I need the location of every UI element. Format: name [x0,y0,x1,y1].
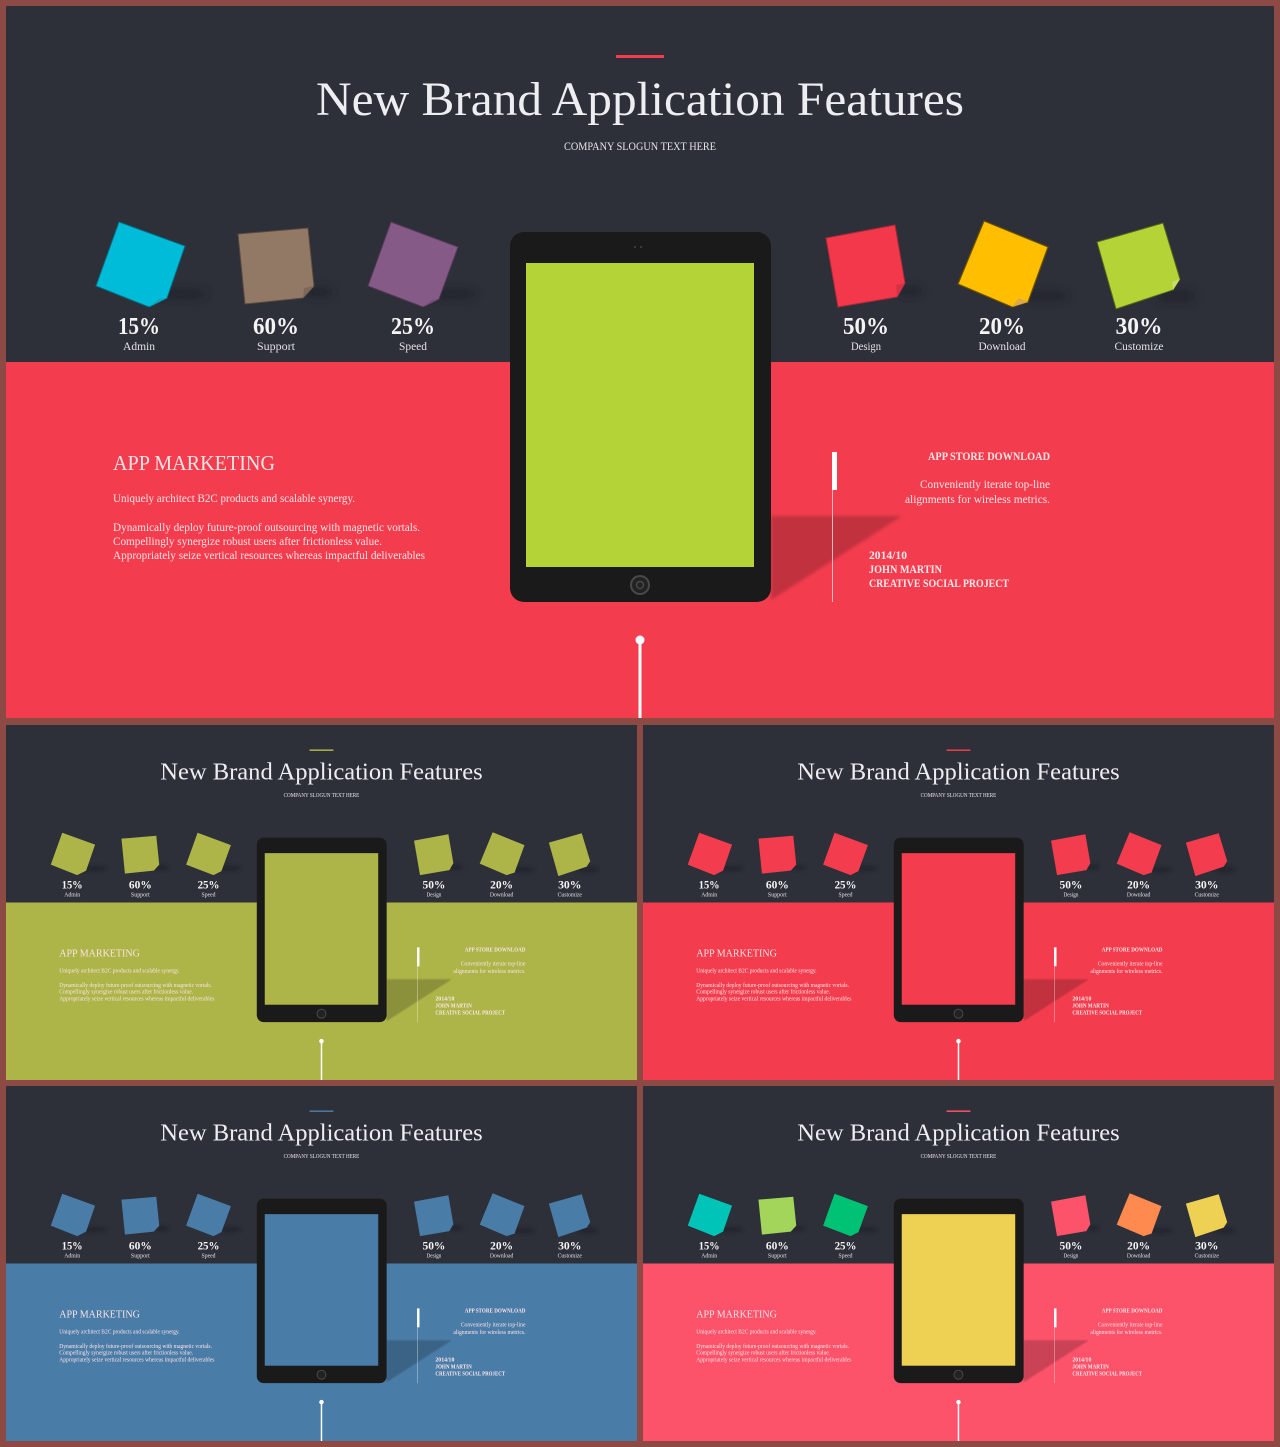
note: speed [368,222,478,307]
stats row: 25% [835,1239,856,1253]
stats row: 50% [422,1239,445,1253]
stats row [62,1239,582,1260]
text block: marketing: Appropriately seize vertical resources whereas impactful deliverables [696,1357,852,1364]
title: New Brand Application Features [160,759,483,785]
stats row: Customize [558,893,582,899]
stat: speed [391,314,435,353]
stats row: Support [131,893,150,899]
stats row: 20% [1127,878,1150,892]
text block: app store and credit [1072,1308,1163,1378]
text block: app store [905,451,1050,506]
stats row: 50% [1059,1239,1082,1253]
stat: admin: 15% [118,314,160,340]
tablet [894,838,1024,1022]
stats row: Support [768,1254,787,1260]
text block: marketing: Dynamically deploy future-proof outsourcing with magnetic vortals. [59,1343,212,1350]
text block: marketing: Dynamically deploy future-proof outsourcing with magnetic vortals. [696,982,849,989]
tablet [894,1199,1024,1383]
text block: app store and credit: Conveniently iterate top-line [1098,1322,1163,1328]
divider marker [832,452,837,602]
stats row: 20% [490,878,513,892]
stat: speed: Speed [399,339,427,353]
text block: marketing: APP MARKETING [696,948,777,959]
stats row: Download [1127,893,1150,899]
text block: marketing: Appropriately seize vertical resources whereas impactful deliverables [59,996,215,1003]
stats row: 50% [422,878,445,892]
text block: marketing copy [113,491,425,562]
heading: app marketing: APP MARKETING [113,451,275,475]
text block: marketing: APP MARKETING [59,1309,140,1320]
note: download [958,221,1069,307]
text block: app store and credit: CREATIVE SOCIAL PROJECT [435,1372,505,1378]
stats row: 15% [62,878,83,892]
text block: project credit [869,550,1009,590]
text block: app store: Conveniently iterate top-line [920,477,1050,491]
stats row [699,1239,1219,1260]
note: admin [96,222,208,307]
stats row: Customize [558,1254,582,1260]
stats row: Admin [64,893,80,899]
stat: design: Design [851,339,881,353]
text block: marketing [696,948,852,1003]
text block: app store: APP STORE DOWNLOAD [928,451,1050,463]
stats row: Support [768,893,787,899]
text block: marketing copy: Appropriately seize vertical resources whereas impactful deliverables [113,548,425,562]
text block: marketing: Appropriately seize vertical resources whereas impactful deliverables [59,1357,215,1364]
text block: app store and credit: JOHN MARTIN [1072,1004,1110,1010]
title: New Brand Application Features [316,73,964,126]
panel: blue slide: COMPANY SLOGUN TEXT HERE [284,1154,360,1160]
text block: app store and credit: Conveniently iterate top-line [461,1322,526,1328]
stats row: Design [426,893,441,899]
text block: marketing copy: Dynamically deploy future-proof outsourcing with magnetic vortals. [113,520,420,534]
note: customize [1097,223,1196,309]
stats row: 20% [1127,1239,1150,1253]
text block: marketing [59,948,215,1003]
stats row: Design [426,1254,441,1260]
stat: admin: Admin [123,339,155,353]
text block: app store and credit: APP STORE DOWNLOAD [465,947,525,953]
tablet [257,1199,387,1383]
text block: marketing: Compellingly synergize robust users after frictionless value. [696,989,831,996]
stats row: 30% [1195,1239,1218,1253]
panel: blue slide [6,1086,637,1441]
stats row: Speed [202,1254,215,1260]
stat: support: Support [257,339,296,353]
stats row: 25% [198,878,219,892]
stats row: Speed [839,893,852,899]
notes row [688,1193,1235,1237]
stats row: 15% [699,878,720,892]
stats row: 60% [766,878,789,892]
text block: app store and credit: 2014/10 [1072,1358,1091,1364]
text block: marketing copy: Compellingly synergize robust users after frictionless value. [113,534,382,548]
stats row: Support [131,1254,150,1260]
panel: red slide [643,725,1274,1080]
text block: marketing: APP MARKETING [696,1309,777,1320]
text block: project credit: JOHN MARTIN [869,564,943,576]
text block: app store and credit: CREATIVE SOCIAL PROJECT [1072,1372,1142,1378]
text block: app store and credit: 2014/10 [1072,997,1091,1003]
stats row: 60% [766,1239,789,1253]
tablet [257,838,387,1022]
stat: design [843,314,889,353]
text block: app store and credit: 2014/10 [435,1358,454,1364]
stat: download [978,314,1026,353]
stats row: 15% [699,1239,720,1253]
text block: app store and credit: 2014/10 [435,997,454,1003]
text block: project credit: 2014/10 [869,550,907,562]
text block: marketing: Dynamically deploy future-proof outsourcing with magnetic vortals. [59,982,212,989]
stats row: 25% [198,1239,219,1253]
text block: marketing copy: Uniquely architect B2C products and scalable synergy. [113,491,355,505]
text block: marketing: Uniquely architect B2C products and scalable synergy. [696,1329,817,1335]
stats row: Customize [1195,893,1219,899]
text block: app store and credit [1072,947,1163,1017]
stat: admin [118,314,160,353]
text block: app store and credit: alignments for wireless metrics. [453,968,526,975]
stats row: Speed [839,1254,852,1260]
text block: marketing: Uniquely architect B2C products and scalable synergy. [696,968,817,974]
note: design [826,225,923,307]
text block: app store and credit: CREATIVE SOCIAL PROJECT [435,1011,505,1017]
stats row: Admin [701,1254,717,1260]
notes row [51,832,598,876]
text block: marketing: Appropriately seize vertical resources whereas impactful deliverables [696,996,852,1003]
stats row: 30% [558,878,581,892]
text block: app store and credit: alignments for wireless metrics. [453,1329,526,1336]
text block: marketing: Uniquely architect B2C products and scalable synergy. [59,1329,180,1335]
text block: app store and credit: JOHN MARTIN [435,1365,473,1371]
text block: app store and credit: alignments for wireless metrics. [1090,1329,1163,1336]
stats row: Design [1063,1254,1078,1260]
stats row: Download [490,1254,513,1260]
title: New Brand Application Features [160,1120,483,1146]
panel: main slide [6,6,1274,718]
stats row [62,878,582,899]
stats row: 30% [1195,878,1218,892]
text block: marketing: Compellingly synergize robust users after frictionless value. [696,1350,831,1357]
text block: marketing [696,1309,852,1364]
stats row: Download [490,893,513,899]
stats row: 60% [129,878,152,892]
stat: download: Download [978,339,1026,353]
stat: support [253,314,299,353]
text block: app store and credit: APP STORE DOWNLOAD [1102,1308,1162,1314]
stats row: Download [1127,1254,1150,1260]
stat: download: 20% [979,314,1025,340]
notes row [51,1193,598,1237]
stats row: 30% [558,1239,581,1253]
title: New Brand Application Features [797,1120,1120,1146]
note: support [238,228,333,304]
stats row: 60% [129,1239,152,1253]
text block: project credit: CREATIVE SOCIAL PROJECT [869,578,1009,590]
stats row: 15% [62,1239,83,1253]
accent line [616,55,664,58]
text block: app store and credit: APP STORE DOWNLOAD [465,1308,525,1314]
stat: speed: 25% [391,314,435,340]
text block: app store and credit: alignments for wireless metrics. [1090,968,1163,975]
stats row: 25% [835,878,856,892]
stat: support: 60% [253,314,299,340]
text block: app store and credit: APP STORE DOWNLOAD [1102,947,1162,953]
text block: app store and credit: Conveniently iterate top-line [1098,961,1163,967]
stats row: 20% [490,1239,513,1253]
stat: customize: 30% [1116,314,1162,340]
panel: olive slide: COMPANY SLOGUN TEXT HERE [284,793,360,799]
stat: customize: Customize [1114,339,1164,353]
tablet shadow [771,516,902,600]
stats row: Design [1063,893,1078,899]
text block: app store and credit: CREATIVE SOCIAL PROJECT [1072,1011,1142,1017]
stats row: Admin [64,1254,80,1260]
stats row: 50% [1059,878,1082,892]
slogan: COMPANY SLOGUN TEXT HERE [564,141,716,153]
panel: pink slide: COMPANY SLOGUN TEXT HERE [921,1154,997,1160]
text block: marketing: Compellingly synergize robust users after frictionless value. [59,989,194,996]
panel: red slide: COMPANY SLOGUN TEXT HERE [921,793,997,799]
stat: customize [1114,314,1164,353]
stats row: Admin [701,893,717,899]
text block: app store and credit: JOHN MARTIN [435,1004,473,1010]
stats row: Speed [202,893,215,899]
text block: app store and credit: JOHN MARTIN [1072,1365,1110,1371]
stat: design: 50% [843,314,889,340]
stats row: Customize [1195,1254,1219,1260]
text block: app store and credit: Conveniently iterate top-line [461,961,526,967]
text block: marketing: Dynamically deploy future-proof outsourcing with magnetic vortals. [696,1343,849,1350]
pin marker [636,636,644,718]
notes row [688,832,1235,876]
stats row [699,878,1219,899]
title: New Brand Application Features [797,759,1120,785]
text block: app store: alignments for wireless metrics. [905,492,1050,506]
tablet [510,232,771,602]
text block: marketing: APP MARKETING [59,948,140,959]
text block: marketing [59,1309,215,1364]
text block: app store and credit [435,1308,526,1378]
text block: marketing: Uniquely architect B2C products and scalable synergy. [59,968,180,974]
text block: app store and credit [435,947,526,1017]
panel: pink slide [643,1086,1274,1441]
panel: olive slide [6,725,637,1080]
text block: marketing: Compellingly synergize robust users after frictionless value. [59,1350,194,1357]
